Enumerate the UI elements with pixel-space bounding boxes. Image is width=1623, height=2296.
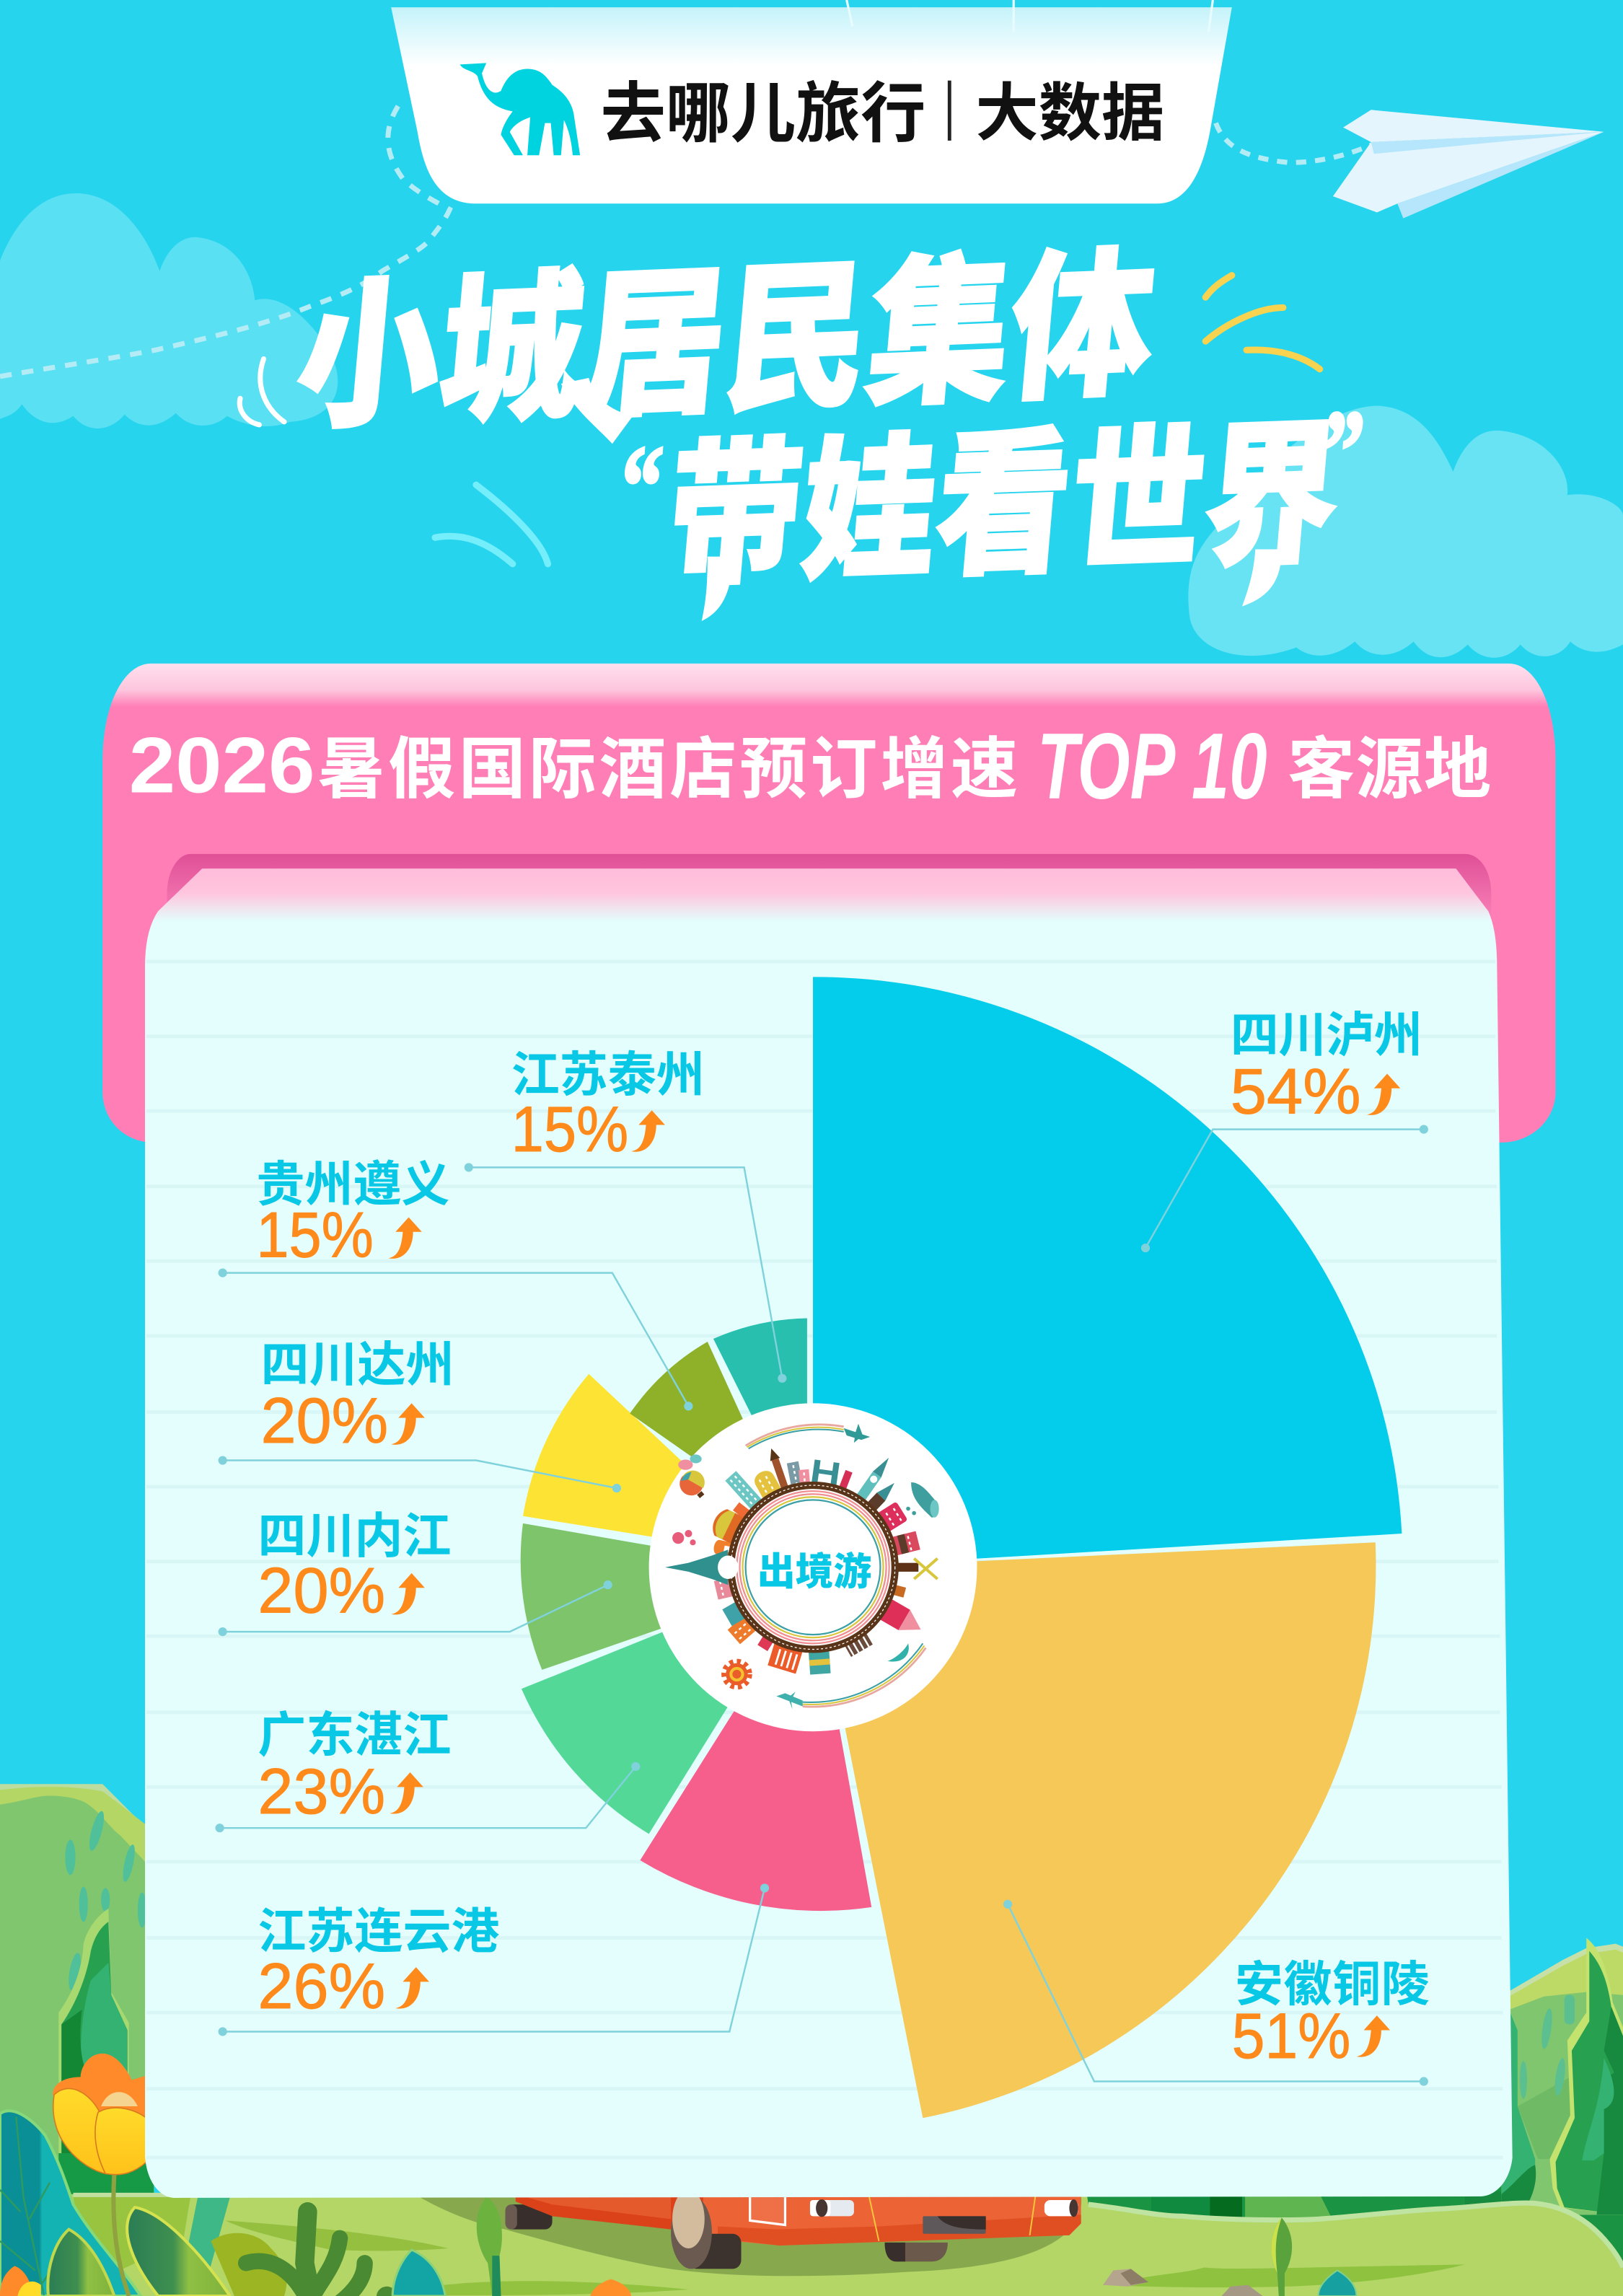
heading year: 2026: [129, 722, 315, 810]
bus shadow: [415, 2194, 1081, 2276]
plane top with trail: [746, 1424, 870, 1448]
rear wheel: [506, 2204, 553, 2230]
slice: 四川达州 20%: [523, 1374, 732, 1549]
slice: 四川泸州 54%: [813, 977, 1402, 1565]
left tall plant: [58, 1909, 129, 2197]
hill leaf marks: [65, 1810, 146, 1991]
bus front: [703, 2194, 1081, 2246]
title: [289, 194, 1368, 621]
leader: 四川泸州: [1141, 1125, 1428, 1252]
label: 安徽铜陵: [1232, 1945, 1430, 2072]
plane bottom with trail: [776, 1643, 925, 1710]
leader lines: [216, 1125, 1428, 2086]
right hill: [1501, 1938, 1623, 2214]
small orange flower: [590, 2279, 631, 2296]
slice: 四川内江 20%: [521, 1523, 732, 1670]
teal stem behind: [183, 2197, 230, 2270]
right big plant: [1556, 1951, 1623, 2214]
label: 安徽铜陵: 安徽铜陵: [1235, 1945, 1430, 2015]
leader: 江苏泰州: [465, 1163, 786, 1383]
hill leaf marks: [1520, 1995, 1575, 2099]
eiffel tower: [665, 1549, 738, 1585]
right side plant by card: [1501, 2013, 1535, 2209]
logo tab: [391, 0, 1232, 203]
slice: 贵州遵义 15%: [630, 1342, 762, 1509]
right teal leaf: [1319, 2270, 1356, 2296]
title line 2: 带娃看世界: [659, 368, 1350, 617]
rainbow rings: [736, 1491, 889, 1643]
label: 广东湛江: 广东湛江: [258, 1697, 451, 1767]
rocks: [1103, 2269, 1262, 2296]
right side plant base: [1501, 2165, 1536, 2209]
panel: chart card: [145, 868, 1513, 2198]
leader: 安徽铜陵: [1003, 1900, 1428, 2086]
far wheel: [885, 2243, 948, 2261]
tulip front right petal: [95, 2108, 146, 2175]
ground rim right: [1088, 2203, 1623, 2267]
leader: 四川达州: [219, 1456, 621, 1492]
tulip stem: [113, 2173, 129, 2296]
slice: 江苏泰州 15%: [713, 1319, 807, 1509]
label: 四川达州: 四川达州: [260, 1326, 454, 1396]
brand name: 去哪儿旅行: [601, 77, 925, 151]
right plant shade: [1596, 2007, 1623, 2214]
teal leaf left: [0, 2111, 141, 2296]
opening quote: “: [616, 423, 667, 549]
center globe illustration: [649, 1403, 977, 1731]
big data label: 大数据: [975, 78, 1164, 149]
leader: 四川内江: [219, 1580, 612, 1636]
teal leaf: [392, 2250, 445, 2296]
slice: 广东湛江 23%: [522, 1604, 762, 1834]
label: 江苏连云港: 江苏连云港: [258, 1893, 499, 1963]
label: 江苏泰州: 江苏泰州: [511, 1036, 705, 1106]
cloud icon lower right: [888, 1643, 909, 1662]
slice: 江苏连云港 26%: [640, 1596, 871, 1911]
icon: paper plane: [1333, 110, 1604, 219]
panel: pink header: [102, 664, 1556, 1143]
ground patch left: [74, 2197, 190, 2285]
slice: 安徽铜陵 51%: [813, 1542, 1376, 2118]
label: 四川泸州: 四川泸州: [1231, 996, 1422, 1066]
dashed flight path right: [1215, 123, 1371, 162]
heading main: 暑假国际酒店预订增速: [318, 731, 1018, 807]
divider: [948, 81, 951, 141]
swish marks left of title: [239, 359, 284, 425]
icon: camel logo: [460, 63, 580, 155]
small tulip bottom left: [0, 2266, 41, 2296]
label: 贵州遵义: 15%: [256, 1198, 374, 1270]
rose chart: [521, 977, 1402, 2118]
bus: [506, 2190, 1081, 2269]
label: 广东湛江: 23%: [258, 1755, 385, 1827]
trim lines: [868, 2194, 1036, 2241]
leader: 贵州遵义: [219, 1269, 693, 1410]
slot behind card: [167, 854, 1491, 938]
icon: sun: [724, 1662, 749, 1686]
bus side: [516, 2194, 706, 2237]
cloud icon right: [906, 1482, 939, 1518]
ground shadow right: [1103, 2264, 1465, 2287]
label: 江苏泰州: [511, 1036, 705, 1165]
globe ring: [731, 1485, 895, 1649]
ground shadow bottom: [444, 2281, 688, 2295]
bus side upper: [516, 2194, 671, 2219]
ring road markings: [731, 1485, 895, 1649]
title stroke tails: [561, 378, 1282, 621]
hub label: 出境游: [757, 1551, 871, 1593]
label: 贵州遵义: 贵州遵义: [256, 1145, 449, 1215]
white hub: [649, 1403, 977, 1731]
tulip front left petal: [53, 2088, 105, 2173]
right small plant: [1271, 2217, 1292, 2296]
ground shadow left: [226, 2220, 448, 2251]
spotted leaf small: [48, 2230, 114, 2296]
label: 江苏泰州: 15%: [511, 1093, 628, 1165]
label: 四川内江: [258, 1497, 451, 1627]
label: 四川内江: 四川内江: [258, 1497, 451, 1567]
leaf veins: [0, 2116, 66, 2295]
heading tail: 客源地: [1288, 731, 1491, 807]
door: [750, 2194, 785, 2225]
tulip back petals: [53, 2054, 146, 2139]
headlight right: [1044, 2199, 1078, 2217]
spotted leaf large: [127, 2207, 230, 2296]
right dark forest band: [1087, 2183, 1623, 2270]
bus front lower band: [718, 2214, 1081, 2246]
label: 江苏连云港: [258, 1893, 499, 2022]
label: 贵州遵义: [256, 1145, 449, 1270]
leader: 江苏连云港: [219, 1883, 769, 2036]
hill lower shade: [1518, 2077, 1570, 2159]
cactus: [246, 2212, 388, 2296]
panel heading: [129, 713, 1491, 819]
right big plant rim: [1549, 1938, 1623, 2214]
label: 四川达州: [260, 1326, 454, 1456]
left hill: [0, 1784, 154, 2212]
skyline buildings: [708, 1447, 927, 1675]
label: 广东湛江: [258, 1697, 451, 1827]
label: 四川泸州: 54%: [1231, 1055, 1361, 1127]
heading TOP 10: TOP 10: [1037, 713, 1267, 819]
tulip stamen: [101, 2092, 138, 2106]
leader: 广东湛江: [216, 1762, 640, 1832]
cloud: lower right: [1188, 405, 1623, 658]
cyan accent marks: [435, 485, 547, 564]
label: 安徽铜陵: 51%: [1232, 2000, 1350, 2072]
closing quote: ”: [1318, 387, 1368, 514]
small dashes at top of tab: [847, 0, 1213, 32]
wheel hub: [672, 2190, 705, 2248]
label: 江苏连云港: 26%: [258, 1950, 385, 2022]
near wheel tyre: [671, 2196, 742, 2269]
ground: [0, 2194, 1623, 2296]
hearts: [672, 1530, 696, 1545]
left dark band: [58, 2153, 154, 2197]
cloud: upper left: [0, 193, 338, 428]
label: 四川泸州: [1231, 996, 1422, 1127]
tall plant near bus: [477, 2197, 502, 2296]
dashed flight path left: [0, 105, 449, 377]
landscape: [0, 1784, 1623, 2296]
label: 四川达州: 20%: [260, 1384, 388, 1456]
right plant lighter patch: [1582, 2058, 1614, 2160]
grill: [923, 2216, 986, 2234]
label: 四川内江: 20%: [258, 1554, 385, 1627]
small clouds by balloon: [678, 1454, 702, 1470]
hot air balloon: [679, 1471, 705, 1498]
windmill: [914, 1559, 938, 1579]
headlight left: [810, 2199, 854, 2217]
yellow-green bush: [211, 2233, 286, 2296]
yellow accent marks: [1205, 276, 1320, 369]
ground rim left: [74, 2193, 176, 2198]
title line 1: 小城居民集体: [289, 194, 1165, 461]
